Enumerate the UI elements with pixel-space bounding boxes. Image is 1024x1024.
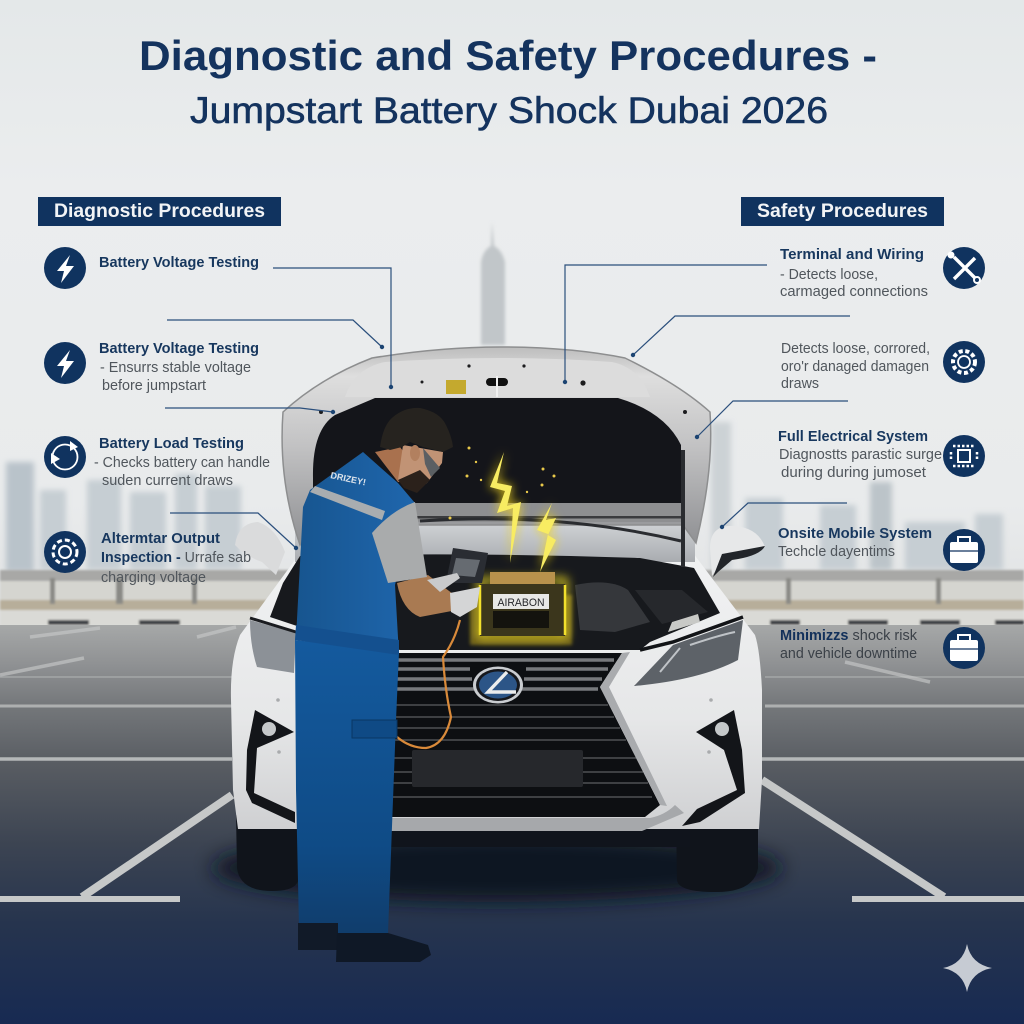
item text: draws [781,376,819,392]
parking sensors [276,698,713,754]
right leader 3 [695,401,848,439]
vest [296,452,415,655]
hood open [282,347,711,545]
lexus logo [473,666,523,704]
car [212,347,782,902]
windshield [295,520,695,562]
sparks [448,446,556,520]
item text: - Detects loose, [780,267,878,283]
left tyre [236,815,298,891]
chrome grille surround [600,652,667,806]
battery label [493,594,549,609]
band strip [400,516,681,518]
panel: safety procedures [741,197,985,669]
item text: Onsite Mobile System [778,526,932,542]
windshield wiper [420,519,681,541]
item text: Battery Voltage Testing [99,341,259,357]
item text: - Ensurrs stable voltage [100,360,251,376]
right fog light housing [682,710,745,826]
icon: corner sparkle [943,944,992,992]
right leader 1 [563,265,767,384]
title [139,32,877,131]
chin trim [388,805,684,831]
item text: Altermtar Output [101,531,220,547]
forearm [397,575,457,617]
hood strut [681,450,685,567]
item text: and vehicle downtime [780,646,917,662]
parking line markings [0,627,1024,899]
icon: gear [943,341,985,383]
hood inner panel [345,358,650,397]
hair [380,408,453,452]
item text: oro'r danaged damagen [781,359,929,375]
icon: chip [943,435,985,477]
battery glow base [470,595,572,645]
under car dark [290,825,690,847]
engine bay [270,554,720,650]
reflective stripe [310,486,385,520]
left leader 2 [167,320,384,349]
vest logo: DRIZEY! [330,470,367,487]
right headlight rim [640,617,743,650]
item: full electrical system [778,429,985,481]
battery glowing sides [480,585,565,635]
grille [388,653,660,817]
small bolt glow [537,503,556,572]
item: battery voltage testing 1 [44,247,259,289]
right fog lamp [715,722,729,736]
icon: circular arrows [44,436,86,478]
item: alternator output inspection [44,531,251,586]
thigh pocket [352,720,397,738]
panel: diagnostic procedures [38,197,281,586]
mirror underside [713,546,765,577]
battery edge glow [480,580,565,636]
item text: Inspection - Urrafe sab [101,550,251,566]
left headlight rim [250,618,296,632]
left leader 4 [170,513,298,550]
left boot [298,923,338,950]
item text: Minimizzs shock risk [780,628,918,644]
item text: Detects loose, corrored, [781,341,930,357]
hood mounting holes [319,364,687,414]
lower glove [450,587,480,617]
waistband [295,625,399,655]
left mirror [235,522,285,575]
item: minimizes shock risk [780,627,985,669]
neck [375,447,425,482]
central tower in haze [481,222,505,345]
title line two: Jumpstart Battery Shock Dubai 2026 [190,90,828,131]
leader lines [165,265,850,550]
item text: Diagnostts parastic surge [779,447,942,463]
car body [231,553,762,829]
orange cable [397,620,460,748]
elevated roadway barrier [0,570,1024,626]
blurred Dubai skyline [6,422,1003,572]
battery [470,572,572,645]
parking lot surface [0,625,1024,1024]
lower grille slats [392,705,652,797]
item text: carmaged connections [780,284,928,300]
mechanic [295,408,488,962]
battery spec plate [493,611,549,628]
right boot [336,933,431,962]
item text: Battery Load Testing [99,436,244,452]
item text [101,531,251,586]
hood underside dark liner [313,398,681,503]
item text [778,429,942,481]
sparks and lightning [448,446,556,572]
icon: briefcase [943,529,985,571]
heading: diagnostic procedures: Diagnostic Procedures [54,201,265,222]
icon: lightning bolt [44,247,86,289]
item text [780,628,918,662]
battery brand: AIRABON [498,597,545,609]
item text: Battery Voltage Testing [99,255,259,271]
left leader 3 [165,408,335,414]
license plate [412,750,583,787]
engine block [575,582,650,632]
small lightning bolt [537,503,556,572]
left fog lamp [262,722,276,736]
hood underside band [395,503,681,522]
item text: during during jumoset [781,465,926,481]
item: battery voltage testing 2 [44,341,259,394]
right leader 4 [720,503,847,529]
right headlight [634,620,743,686]
title line one: Diagnostic and Safety Procedures - [139,32,877,79]
item text: before jumpstart [102,378,206,394]
background sky [0,0,1024,630]
bay highlight [668,614,700,632]
heading: safety procedures: Safety Procedures [757,201,928,222]
right leader 2 [631,316,850,357]
item: onsite mobile system [778,526,985,571]
right headlight detail [660,632,735,672]
pants [295,640,399,933]
item text [778,526,932,560]
heading: diagnostic procedures [38,197,281,226]
grey sleeve [372,502,427,583]
icon: gear circuit [44,531,86,573]
left fog light housing [246,710,295,823]
item text [94,436,270,489]
item text: suden current draws [102,473,233,489]
item: corrosion check [781,341,985,392]
face [398,445,443,490]
item text: Techcle dayentims [778,544,895,560]
item text: Terminal and Wiring [780,247,924,263]
heading: safety procedures [741,197,944,226]
item text: - Checks battery can handle [94,455,270,471]
item: terminal and wiring [780,247,985,300]
right tyre [676,815,758,892]
beard [398,470,430,493]
large lightning bolt [490,452,521,563]
safety glasses [423,448,440,477]
item text: Full Electrical System [778,429,928,445]
bolt glow [490,452,521,563]
right mirror [710,526,765,576]
ear [410,445,420,461]
battery case [480,584,565,636]
hood sticker [446,380,466,394]
icon: crossed tools [943,247,985,289]
diagnostic tool [447,548,488,583]
item: battery load testing [44,436,270,489]
battery terminals [490,572,555,584]
left headlight [250,620,296,673]
icon: briefcase [943,627,985,669]
upper glove [427,573,460,592]
engine cover [635,590,708,624]
item text [99,341,259,394]
item text [780,247,928,300]
upper grille slats [395,660,614,689]
item text: charging voltage [101,570,206,586]
item text [781,341,930,392]
left leader 1 [273,268,393,389]
hood latch [486,376,508,397]
icon: lightning bolt [44,342,86,384]
ground shadow [212,834,782,902]
